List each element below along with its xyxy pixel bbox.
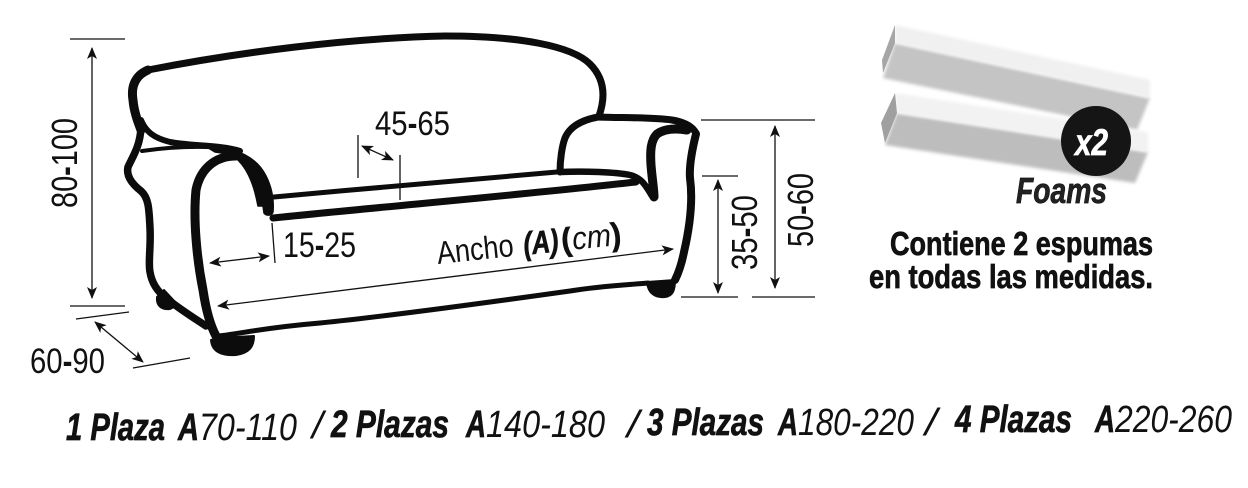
size list xyxy=(66,399,1232,449)
label Ancho (A)(cm): cm xyxy=(570,217,613,257)
4 plazas xyxy=(954,399,1232,441)
label Ancho (A)(cm) xyxy=(435,216,623,271)
separator: / xyxy=(624,404,643,446)
label 80-100: 80-100 xyxy=(44,118,85,208)
depth dimension 60-90 xyxy=(76,312,190,368)
foams caption: Foams xyxy=(1016,170,1107,211)
2 plazas: 140-180 xyxy=(486,404,605,446)
foam note: Contiene 2 espumas xyxy=(890,225,1153,262)
3 plazas: A xyxy=(777,402,798,444)
2 plazas: 2 Plazas xyxy=(330,404,449,446)
4 plazas: A xyxy=(1094,399,1115,441)
left arm and side xyxy=(141,120,240,151)
foam note xyxy=(869,225,1153,295)
2 plazas xyxy=(330,404,605,446)
foam note: en todas las medidas. xyxy=(869,258,1153,295)
label 35-50: 35-50 xyxy=(724,195,765,270)
4 plazas: 4 Plazas xyxy=(954,399,1072,441)
seat cushion lines xyxy=(274,172,557,197)
foam blocks illustration xyxy=(881,25,1150,183)
seat depth dimension 45-65 xyxy=(358,135,400,200)
back left foot xyxy=(157,290,178,309)
separator: / xyxy=(922,402,941,444)
label Ancho (A)(cm): ( xyxy=(559,221,573,258)
width arrow xyxy=(218,249,673,306)
x2 badge: x2 xyxy=(1073,122,1108,163)
separator: / xyxy=(309,405,327,447)
1 plaza: 1 Plaza xyxy=(66,407,165,449)
bottom foam block xyxy=(881,93,1148,183)
1 plaza: 70-110 xyxy=(199,407,297,449)
label 50-60: 50-60 xyxy=(780,173,821,247)
2 plazas: A xyxy=(465,404,486,446)
right arm xyxy=(560,117,696,172)
front rail xyxy=(218,283,648,336)
1 plaza xyxy=(66,407,297,449)
3 plazas: 180-220 xyxy=(798,402,914,444)
3 plazas: 3 Plazas xyxy=(647,402,764,444)
3 plazas xyxy=(647,402,914,444)
x2 badge xyxy=(1061,106,1131,176)
arm height dimension 50-60 xyxy=(701,120,815,297)
label 60-90: 60-90 xyxy=(30,342,105,381)
arm width dimension 15-25 xyxy=(210,223,275,263)
left arm front roll xyxy=(195,156,236,336)
dimension labels xyxy=(30,105,821,381)
front left foot xyxy=(211,336,254,355)
height dimension 80-100 xyxy=(70,39,125,306)
label 45-65: 45-65 xyxy=(375,105,450,143)
dimension lines and arrows xyxy=(70,39,815,368)
label 15-25: 15-25 xyxy=(283,226,356,265)
1 plaza: A xyxy=(177,407,199,449)
top foam block xyxy=(882,25,1150,130)
label Ancho (A)(cm): (A) xyxy=(521,222,560,262)
label Ancho (A)(cm): Ancho xyxy=(435,227,515,271)
right foot xyxy=(647,280,675,297)
sofa back outline xyxy=(148,36,603,116)
sofa illustration xyxy=(128,36,696,355)
seat height dimension 35-50 xyxy=(681,176,738,297)
label Ancho (A)(cm): ) xyxy=(609,216,623,253)
